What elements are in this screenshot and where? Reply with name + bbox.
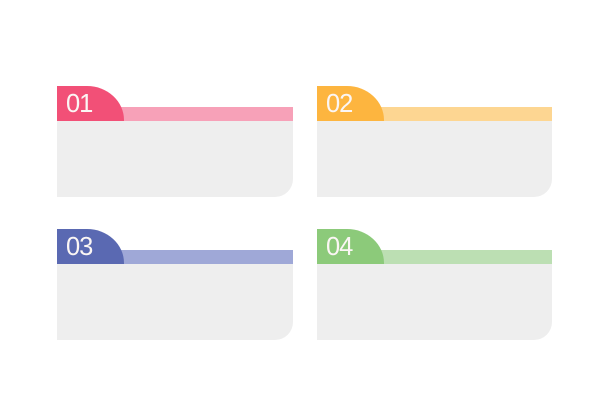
panel: card 02 xyxy=(317,86,552,197)
content box 01 xyxy=(57,120,293,197)
number tab 04: 04 xyxy=(326,233,352,261)
header strip 04 xyxy=(317,250,552,264)
number tab 03 xyxy=(57,229,124,264)
header strip 03 xyxy=(57,250,293,264)
content box 03 xyxy=(57,264,293,340)
number tab 01: 01 xyxy=(66,90,92,118)
number tab 03: 03 xyxy=(66,233,92,261)
number tab 04 xyxy=(317,229,384,264)
content box 02 xyxy=(317,120,552,197)
panel: card 03 xyxy=(57,229,293,340)
panel: card 01 xyxy=(57,86,293,197)
panel: card 04 xyxy=(317,229,552,340)
content box 04 xyxy=(317,264,552,340)
header strip 01 xyxy=(57,107,293,120)
number tab 02: 02 xyxy=(326,90,352,118)
number tab 01 xyxy=(57,86,124,120)
number tab 02 xyxy=(317,86,384,120)
header strip 02 xyxy=(317,107,552,120)
